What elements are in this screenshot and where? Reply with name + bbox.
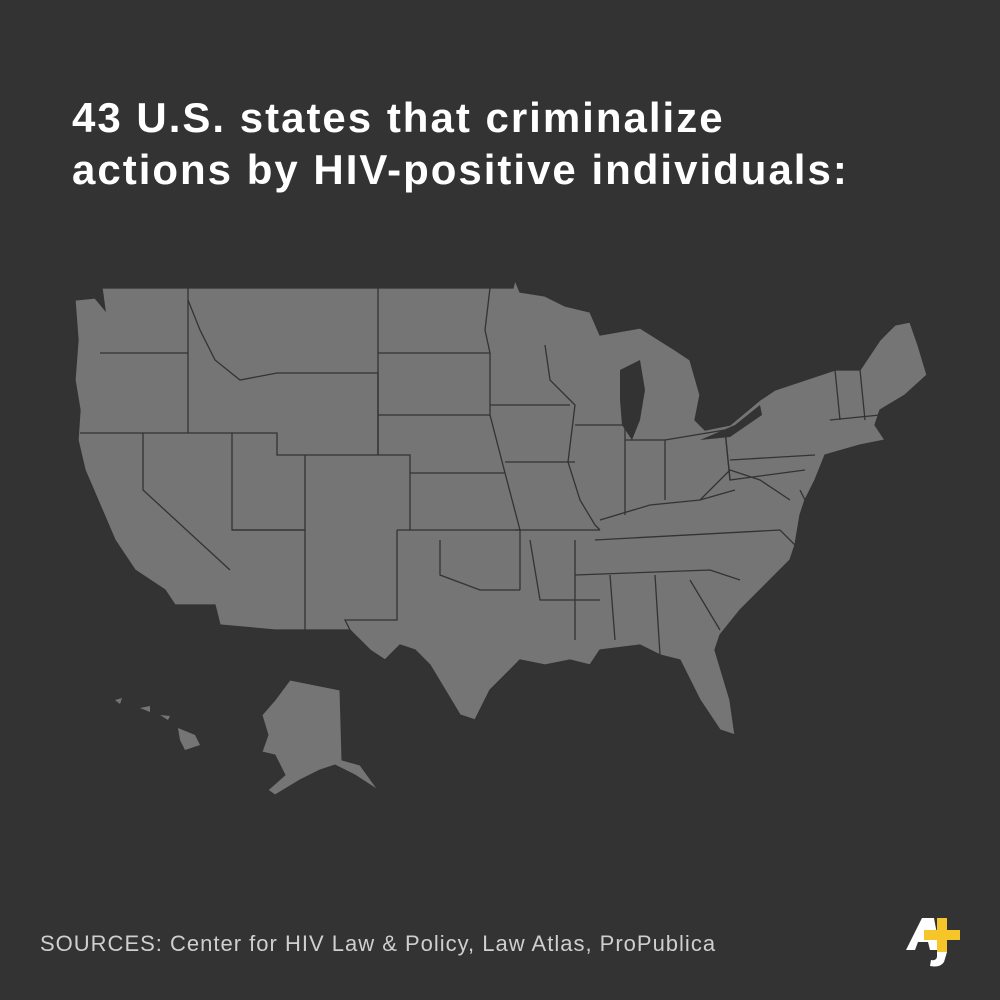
title: actions by HIV-positive individuals:: [72, 146, 849, 193]
map: Hawaii: [115, 698, 200, 750]
lakes: [620, 360, 645, 440]
map: contiguous US: [75, 280, 927, 735]
title: 43 U.S. states that criminalize: [72, 94, 725, 141]
title: [72, 94, 849, 193]
map: Alaska: [262, 680, 378, 795]
source text: SOURCES: Center for HIV Law & Policy, Law Atlas, ProPublica: [40, 931, 716, 956]
